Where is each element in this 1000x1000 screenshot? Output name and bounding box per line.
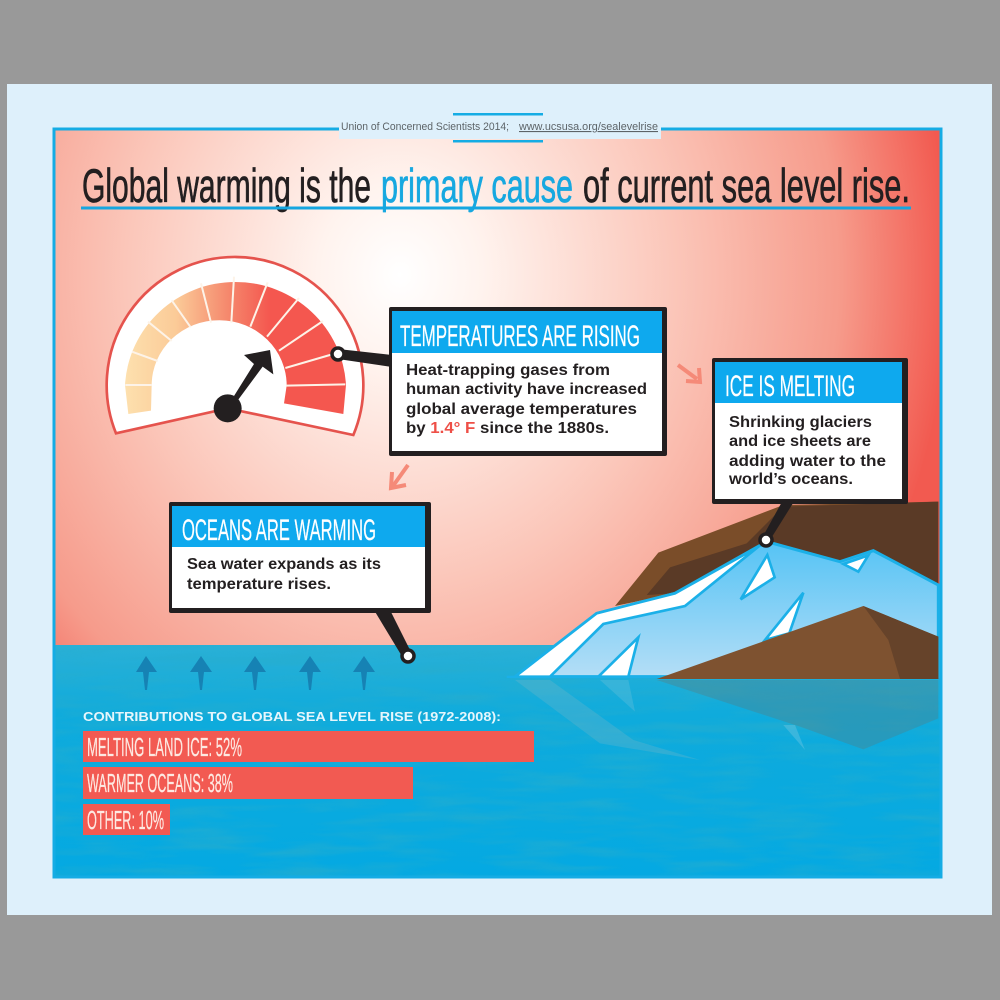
callout header	[715, 362, 902, 403]
callout body: by 1.4° F since the 1880s.	[406, 420, 609, 437]
source credit: Union of Concerned Scientists 2014;	[341, 121, 509, 133]
callout header	[172, 506, 425, 547]
callout body	[728, 414, 886, 488]
ocean	[54, 645, 941, 877]
bar: warmer oceans: WARMER OCEANS: 38%	[87, 768, 233, 798]
callout header: OCEANS ARE WARMING	[182, 514, 376, 547]
ice mass	[515, 542, 938, 677]
callout body: Sea water expands as its	[187, 556, 381, 573]
bar: other: OTHER: 10%	[87, 805, 164, 835]
rising water arrows	[136, 656, 375, 690]
front mountain	[657, 606, 938, 679]
callout: oceans are warming	[169, 502, 431, 613]
bar: melting land ice	[83, 731, 534, 762]
pointer: gauge to temperature box	[332, 348, 392, 367]
back mountain	[615, 502, 938, 606]
callout body: Heat-trapping gases from	[406, 362, 610, 379]
callout header: ICE IS MELTING	[725, 370, 855, 403]
callout body: Shrinking glaciers	[729, 414, 872, 431]
callout: ice is melting	[712, 358, 908, 504]
gauge needle	[214, 350, 273, 422]
bar chart	[83, 731, 534, 835]
title: Global warming is the	[82, 159, 371, 212]
callout header	[392, 311, 662, 353]
callout body: world’s oceans.	[728, 471, 853, 488]
callout body: temperature rises.	[187, 576, 331, 593]
source credit	[339, 113, 661, 142]
title	[81, 159, 911, 212]
callout body: global average temperatures	[406, 401, 637, 418]
temperature gauge	[107, 257, 363, 435]
iceberg and mountains	[507, 502, 938, 760]
callout header: TEMPERATURES ARE RISING	[400, 320, 640, 353]
arrow: temperatures to ice	[678, 365, 700, 382]
reflection in water	[515, 680, 938, 760]
gauge colour segments	[125, 277, 346, 414]
chart heading: CONTRIBUTIONS TO GLOBAL SEA LEVEL RISE (1972-2008):	[83, 709, 501, 724]
arrow: temperatures to oceans	[391, 465, 408, 488]
pointer: oceans box to water	[374, 610, 414, 662]
source credit: www.ucsusa.org/sealevelrise	[518, 121, 658, 133]
gauge housing	[107, 257, 363, 435]
scene frame	[54, 129, 941, 877]
bar: melting land ice: MELTING LAND ICE: 52%	[87, 732, 242, 762]
title: primary cause	[381, 159, 573, 212]
bar: other	[83, 804, 170, 835]
pointer: ice box to iceberg	[760, 500, 795, 546]
callout body	[406, 362, 647, 437]
callout body: and ice sheets are	[729, 433, 871, 450]
callout body: adding water to the	[729, 453, 886, 470]
snow highlights	[515, 547, 868, 677]
callout: temperatures are rising	[389, 307, 667, 456]
callout body	[187, 556, 381, 593]
callout body: human activity have increased	[406, 381, 647, 398]
